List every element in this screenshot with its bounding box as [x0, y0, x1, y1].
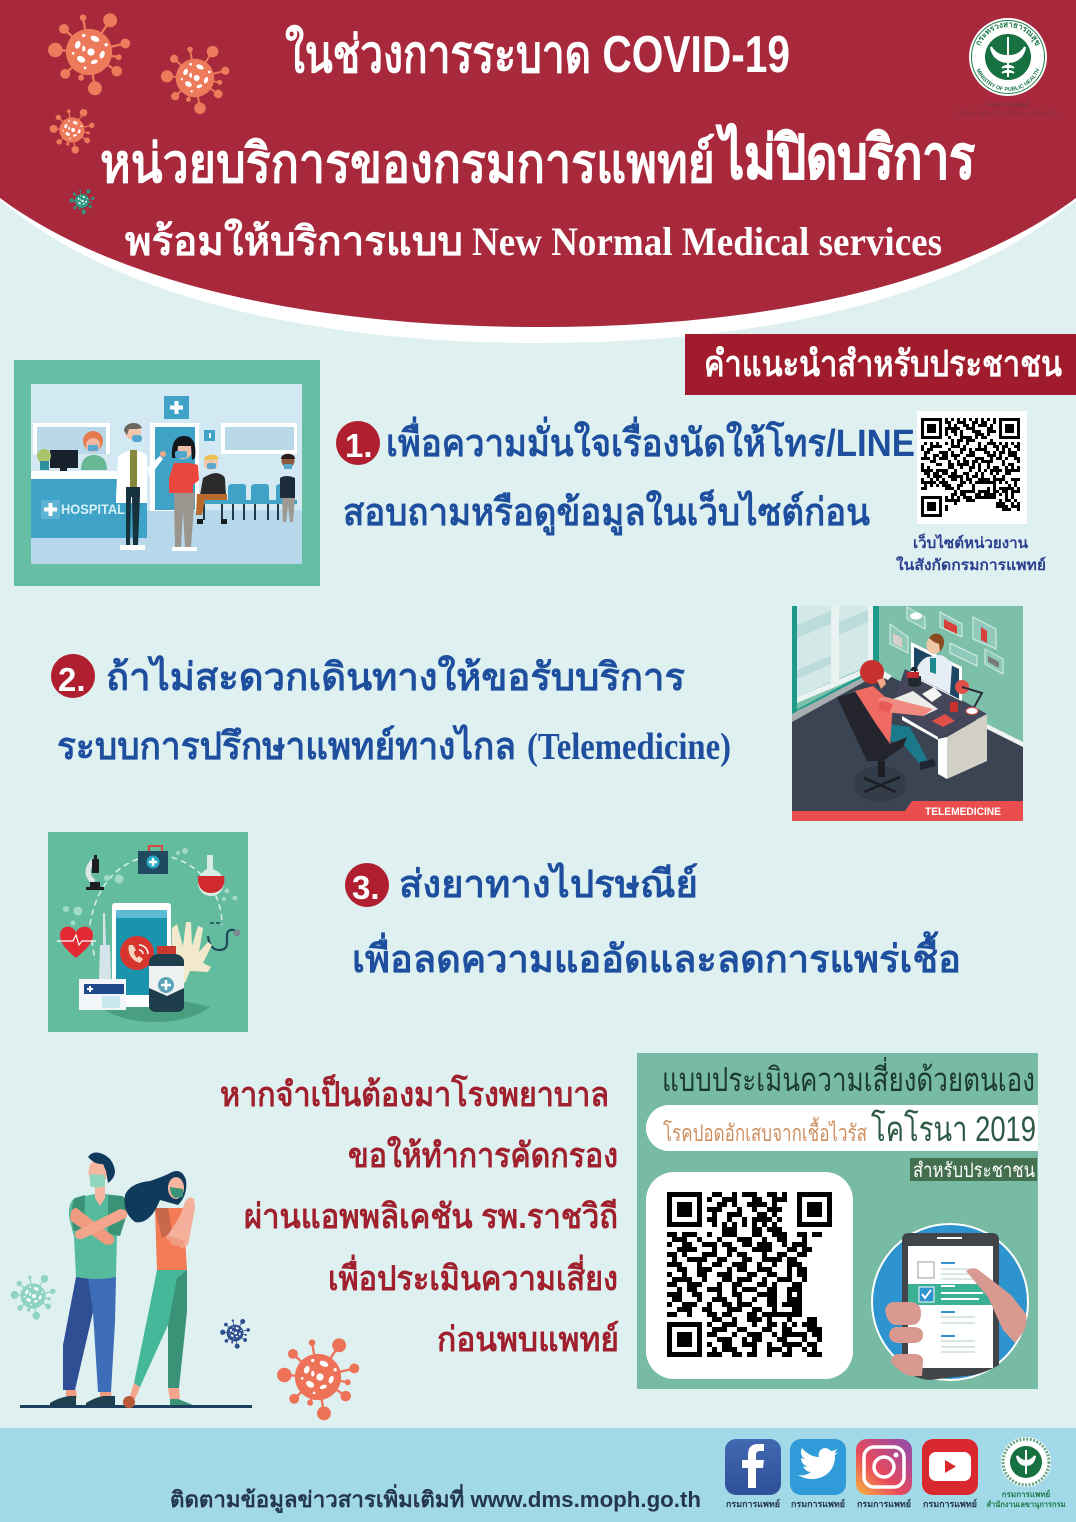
title line 2: หน่วยบริการของกรมการแพทย์: [100, 133, 715, 194]
title line 3: พร้อมให้บริการแบบ: [125, 218, 463, 264]
ministry logo: กระทรวงสาธารณสุข: [976, 22, 1040, 46]
ministry logo: [958, 18, 1058, 118]
icon: microscope: [86, 855, 104, 890]
panel: telemedicine illustration: [792, 606, 1023, 821]
panel: telemedicine illustration: TELEMEDICINE: [925, 806, 1001, 818]
subtitle pill: โรคปอดอักเสบจากเชื้อไวรัส: [663, 1117, 867, 1146]
icon: medical bag: [138, 846, 168, 874]
title line 3: [125, 218, 942, 264]
title line 2: [100, 122, 975, 194]
virus icons in header: [48, 13, 229, 214]
icon: stethoscope: [208, 923, 240, 950]
panel: hospital illustration: [14, 360, 320, 586]
social icon: youtube: กรมการแพทย์: [923, 1498, 977, 1509]
title line 2: ไม่ปิดบริการ: [715, 122, 975, 191]
footer ministry logo: สำนักงานเลขานุการกรม: [986, 1500, 1066, 1510]
social icon: youtube: [922, 1439, 978, 1509]
number badge 2: 2.: [58, 661, 86, 698]
step 3 text: เพื่อลดความแออัดและลดการแพร่เชื้อ: [352, 931, 961, 981]
title line 1: ในช่วงการระบาด COVID-19: [285, 24, 790, 84]
audience tag: สำหรับประชาชน: [913, 1160, 1035, 1182]
QR code: assessment: [646, 1172, 853, 1379]
advice tag: [685, 334, 1076, 395]
title line 3: New Normal Medical services: [472, 219, 942, 264]
footer band: [0, 1428, 1076, 1522]
social icon: facebook: [725, 1439, 781, 1509]
number badge 2: [51, 654, 95, 698]
ministry logo: กรมการแพทย์: [987, 100, 1029, 109]
virus icons near couple: [11, 1275, 359, 1420]
number badge 3: 3.: [352, 869, 380, 906]
hospital visit advice text: ก่อนพบแพทย์: [437, 1320, 619, 1359]
icon: phone checklist: [872, 1224, 1028, 1380]
hospital visit advice text: หากจำเป็นต้องมาโรงพยาบาล: [220, 1073, 609, 1114]
ministry logo: MINISTRY OF PUBLIC HEALTH: [976, 68, 1040, 91]
social icon: twitter: [790, 1439, 846, 1509]
man: [50, 1152, 127, 1405]
panel: medicine delivery illustration: [48, 832, 248, 1032]
hospital visit advice text: ขอให้ทำการคัดกรอง: [348, 1135, 618, 1175]
step 1 text: สอบถามหรือดูข้อมูลในเว็บไซต์ก่อน: [343, 489, 870, 536]
icon: heart: [57, 927, 96, 958]
step 3 text: ส่งยาทางไปรษณีย์: [399, 862, 698, 906]
QR code: agency websites: เว็บไซต์หน่วยงาน: [913, 533, 1029, 552]
icon: flask: [198, 855, 224, 896]
illustration: masked couple: [20, 1152, 252, 1408]
number badge 1: [336, 421, 380, 465]
social icon: instagram: [856, 1439, 912, 1509]
woman: [123, 1171, 195, 1408]
header banner: [0, 0, 1076, 343]
step 2 text: (Telemedicine): [527, 726, 731, 768]
social icon: twitter: กรมการแพทย์: [791, 1498, 845, 1509]
footer ministry logo: [986, 1437, 1066, 1510]
step 2 text: ถ้าไม่สะดวกเดินทางให้ขอรับบริการ: [106, 655, 686, 699]
subtitle pill: [646, 1105, 1038, 1151]
panel: self risk assessment: [637, 1053, 1038, 1389]
social icon: facebook: กรมการแพทย์: [726, 1498, 780, 1509]
number badge 1: 1.: [345, 427, 373, 464]
step 2 text: [51, 654, 731, 768]
QR code: agency websites: ในสังกัดกรมการแพทย์: [896, 556, 1046, 574]
QR code: agency websites: [896, 411, 1046, 574]
step 3 text: [345, 862, 961, 981]
step 1 text: เพื่อความมั่นใจเรื่องนัดให้โทร/LINE: [386, 416, 915, 465]
ministry logo: DEPARTMENT OF MEDICAL SERVICES: [958, 112, 1058, 118]
step 1 text: [336, 416, 915, 536]
social icon: instagram: กรมการแพทย์: [857, 1498, 911, 1509]
panel: hospital illustration: HOSPITAL: [61, 502, 125, 517]
step 2 text: ระบบการปรึกษาแพทย์ทางไกล: [57, 724, 516, 768]
footer ministry logo: กรมการแพทย์: [1002, 1489, 1051, 1499]
footer follow text: ติดตามข้อมูลข่าวสารเพิ่มเติมที่ www.dms.moph.go.th: [170, 1483, 701, 1514]
hospital visit advice text: [220, 1073, 619, 1359]
hospital visit advice text: ผ่านแอพพลิเคชัน รพ.ราชวิถี: [244, 1198, 618, 1236]
hospital visit advice text: เพื่อประเมินความเสี่ยง: [328, 1254, 618, 1298]
number badge 3: [345, 863, 389, 907]
subtitle pill: โคโรนา 2019: [871, 1109, 1036, 1149]
